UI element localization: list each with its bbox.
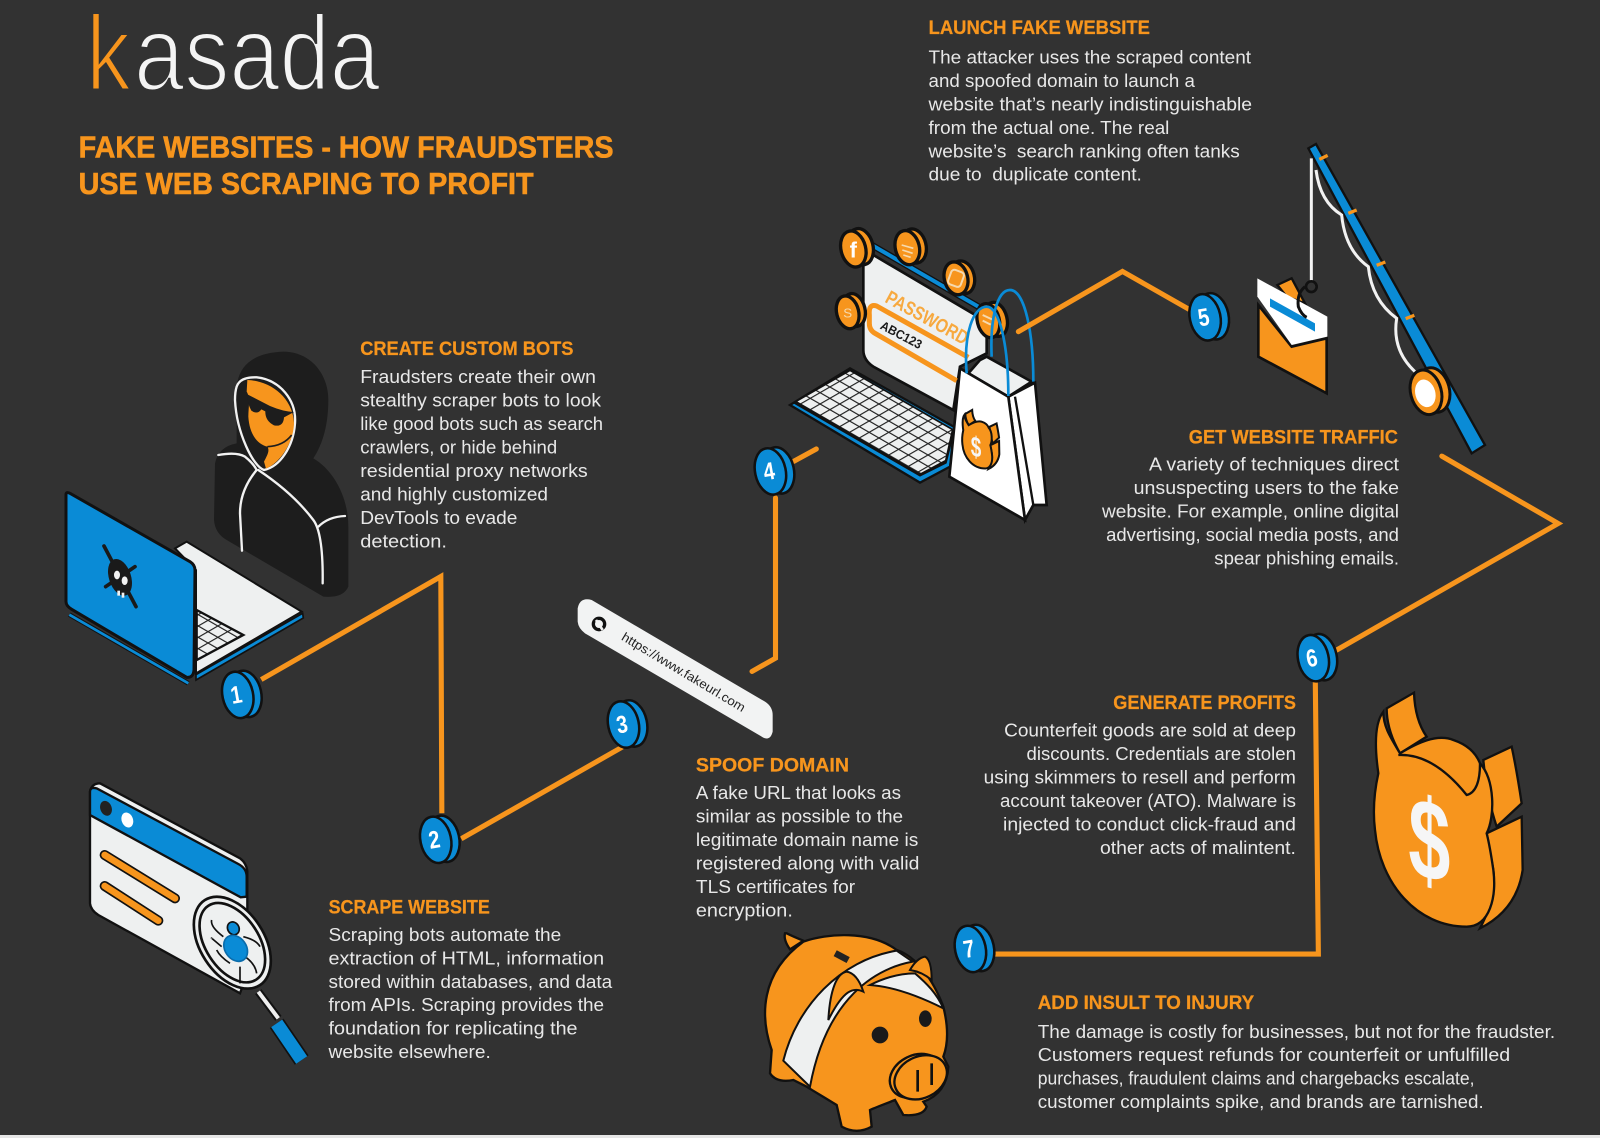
badge 7 xyxy=(951,922,998,975)
badge 6 xyxy=(1293,631,1341,684)
monitor: PASSWORD xyxy=(882,288,972,349)
text block: spoof domain: encryption. xyxy=(696,899,793,920)
social coins xyxy=(833,226,1011,340)
text block: spoof domain xyxy=(696,754,919,920)
badge 6: 6 xyxy=(1304,644,1320,673)
connector path bag to 5 xyxy=(1018,271,1189,332)
illustration: web page with magnifier and bug xyxy=(90,783,302,1060)
badge 4 xyxy=(751,444,798,498)
text block: create custom bots: DevTools to evade xyxy=(360,507,517,528)
text block: scrape website: from APIs. Scraping provides the xyxy=(329,994,604,1015)
text block: launch fake website: website’s search ranking often tanks xyxy=(928,141,1240,162)
badge 5: 5 xyxy=(1196,303,1212,332)
connector path 2 to 3 xyxy=(461,747,622,839)
text block: create custom bots: crawlers, or hide behind xyxy=(360,437,557,458)
social coins: f xyxy=(850,237,858,262)
badge 2 xyxy=(416,813,464,866)
monitor xyxy=(863,245,987,410)
bag logo: mini devil coin: $ xyxy=(971,431,982,465)
text block: spoof domain: A fake URL that looks as xyxy=(696,782,901,803)
text block: get website traffic xyxy=(1101,426,1399,568)
title: USE WEB SCRAPING TO PROFIT xyxy=(79,166,534,201)
illustration: hooded hacker with laptop xyxy=(66,352,348,683)
text block: spoof domain: TLS certificates for xyxy=(696,876,855,897)
text block: launch fake website: from the actual one. The real xyxy=(929,117,1169,138)
badge 2: 2 xyxy=(426,825,442,854)
text block: scrape website: foundation for replicating the xyxy=(329,1018,578,1039)
text block: create custom bots: stealthy scraper bots to look xyxy=(360,390,602,411)
laptop with skull xyxy=(66,493,303,683)
badge 3: 3 xyxy=(614,710,630,739)
text block: spoof domain: legitimate domain name is xyxy=(696,829,918,850)
text block: create custom bots: Fraudsters create their own xyxy=(360,366,596,387)
illustration: fake site monitor, keyboard and shopping bag xyxy=(790,226,1047,520)
title xyxy=(79,130,614,201)
text block: generate profits: Counterfeit goods are sold at deep xyxy=(1004,720,1296,741)
badge 1 xyxy=(218,668,266,721)
monitor: ABC123 xyxy=(878,319,924,352)
connector path 4 to monitor xyxy=(794,449,816,461)
text block: launch fake website: due to duplicate content. xyxy=(929,164,1142,185)
text block: create custom bots: and highly customized xyxy=(360,484,548,505)
text block: spoof domain: SPOOF DOMAIN xyxy=(696,754,849,776)
rod xyxy=(1308,144,1485,453)
hacker figure xyxy=(214,352,348,597)
illustration: bandaged piggy bank xyxy=(765,933,954,1131)
text block: get website traffic: unsuspecting users to the fake xyxy=(1134,477,1399,498)
illustration: devil dollar coin xyxy=(1374,693,1523,928)
text block: generate profits: injected to conduct click-fraud and xyxy=(1003,814,1296,835)
text block: get website traffic: A variety of techniques direct xyxy=(1149,453,1399,474)
text block: spoof domain: registered along with valid xyxy=(696,852,919,873)
text block: launch fake website: website that’s nearly indistinguishable xyxy=(928,94,1252,115)
text block: add insult to injury: purchases, fraudulent claims and chargebacks escalate, xyxy=(1038,1068,1474,1089)
text block: launch fake website xyxy=(928,17,1252,185)
text block: get website traffic: advertising, social media posts, and xyxy=(1106,524,1399,545)
email envelope on hook xyxy=(1257,278,1327,393)
shopping bag xyxy=(949,290,1047,520)
text block: launch fake website: LAUNCH FAKE WEBSITE xyxy=(929,17,1150,39)
illustration: fishing rod hooking an email xyxy=(1257,144,1485,453)
illustration: fake URL bar: https://www.fakeurl.com xyxy=(619,630,748,715)
badge 4: 4 xyxy=(761,457,777,486)
connector path rod to 6 xyxy=(1337,456,1558,650)
illustration: devil dollar coin: $ xyxy=(1408,771,1450,909)
text block: scrape website: website elsewhere. xyxy=(328,1041,491,1062)
text block: add insult to injury: The damage is costly for businesses, but not for the fraudster. xyxy=(1038,1021,1555,1042)
text block: scrape website: stored within databases, and data xyxy=(329,971,613,992)
title: FAKE WEBSITES - HOW FRAUDSTERS xyxy=(79,130,614,164)
text block: scrape website: SCRAPE WEBSITE xyxy=(329,896,490,918)
connector path 6 to 7 xyxy=(995,682,1318,954)
text block: launch fake website: and spoofed domain to launch a xyxy=(929,70,1196,91)
keyboard xyxy=(790,368,957,483)
text block: generate profits: account takeover (ATO). Malware is xyxy=(1000,790,1296,811)
text block: scrape website: extraction of HTML, information xyxy=(329,947,604,968)
text block: generate profits: GENERATE PROFITS xyxy=(1113,692,1296,714)
text block: get website traffic: website. For example, online digital xyxy=(1101,500,1399,521)
text block: add insult to injury: customer complaints spike, and brands are tarnished. xyxy=(1038,1091,1484,1112)
text block: spoof domain: similar as possible to the xyxy=(696,805,903,826)
text block: get website traffic: spear phishing emails. xyxy=(1214,547,1399,568)
text block: scrape website: Scraping bots automate the xyxy=(329,924,561,945)
text block: generate profits xyxy=(984,692,1296,858)
text block: scrape website xyxy=(328,896,613,1062)
text block: add insult to injury: ADD INSULT TO INJURY xyxy=(1038,992,1254,1014)
text block: generate profits: using skimmers to resell and perform xyxy=(984,767,1296,788)
badge 5 xyxy=(1185,290,1233,343)
text block: create custom bots: residential proxy networks xyxy=(360,460,588,481)
text block: get website traffic: GET WEBSITE TRAFFIC xyxy=(1189,426,1398,448)
badge 3 xyxy=(604,697,651,751)
text block: add insult to injury xyxy=(1038,992,1555,1112)
bag logo: mini devil coin xyxy=(962,410,999,469)
connector path 1 to 2 xyxy=(261,577,442,813)
text block: launch fake website: The attacker uses the scraped content xyxy=(929,46,1251,67)
text block: create custom bots xyxy=(360,338,603,551)
text block: create custom bots: detection. xyxy=(360,530,447,551)
illustration: fake URL bar xyxy=(578,599,773,739)
social coins: S xyxy=(843,305,852,320)
badge 1: 1 xyxy=(228,680,244,709)
text block: generate profits: other acts of malintent. xyxy=(1100,837,1296,858)
badge 7: 7 xyxy=(961,935,977,964)
text block: generate profits: discounts. Credentials are stolen xyxy=(1027,743,1296,764)
text block: add insult to injury: Customers request refunds for counterfeit or unfulfilled xyxy=(1038,1044,1510,1065)
text block: create custom bots: CREATE CUSTOM BOTS xyxy=(360,338,574,360)
connector path URL to 4 xyxy=(752,498,776,671)
text block: create custom bots: like good bots such as search xyxy=(360,413,603,434)
